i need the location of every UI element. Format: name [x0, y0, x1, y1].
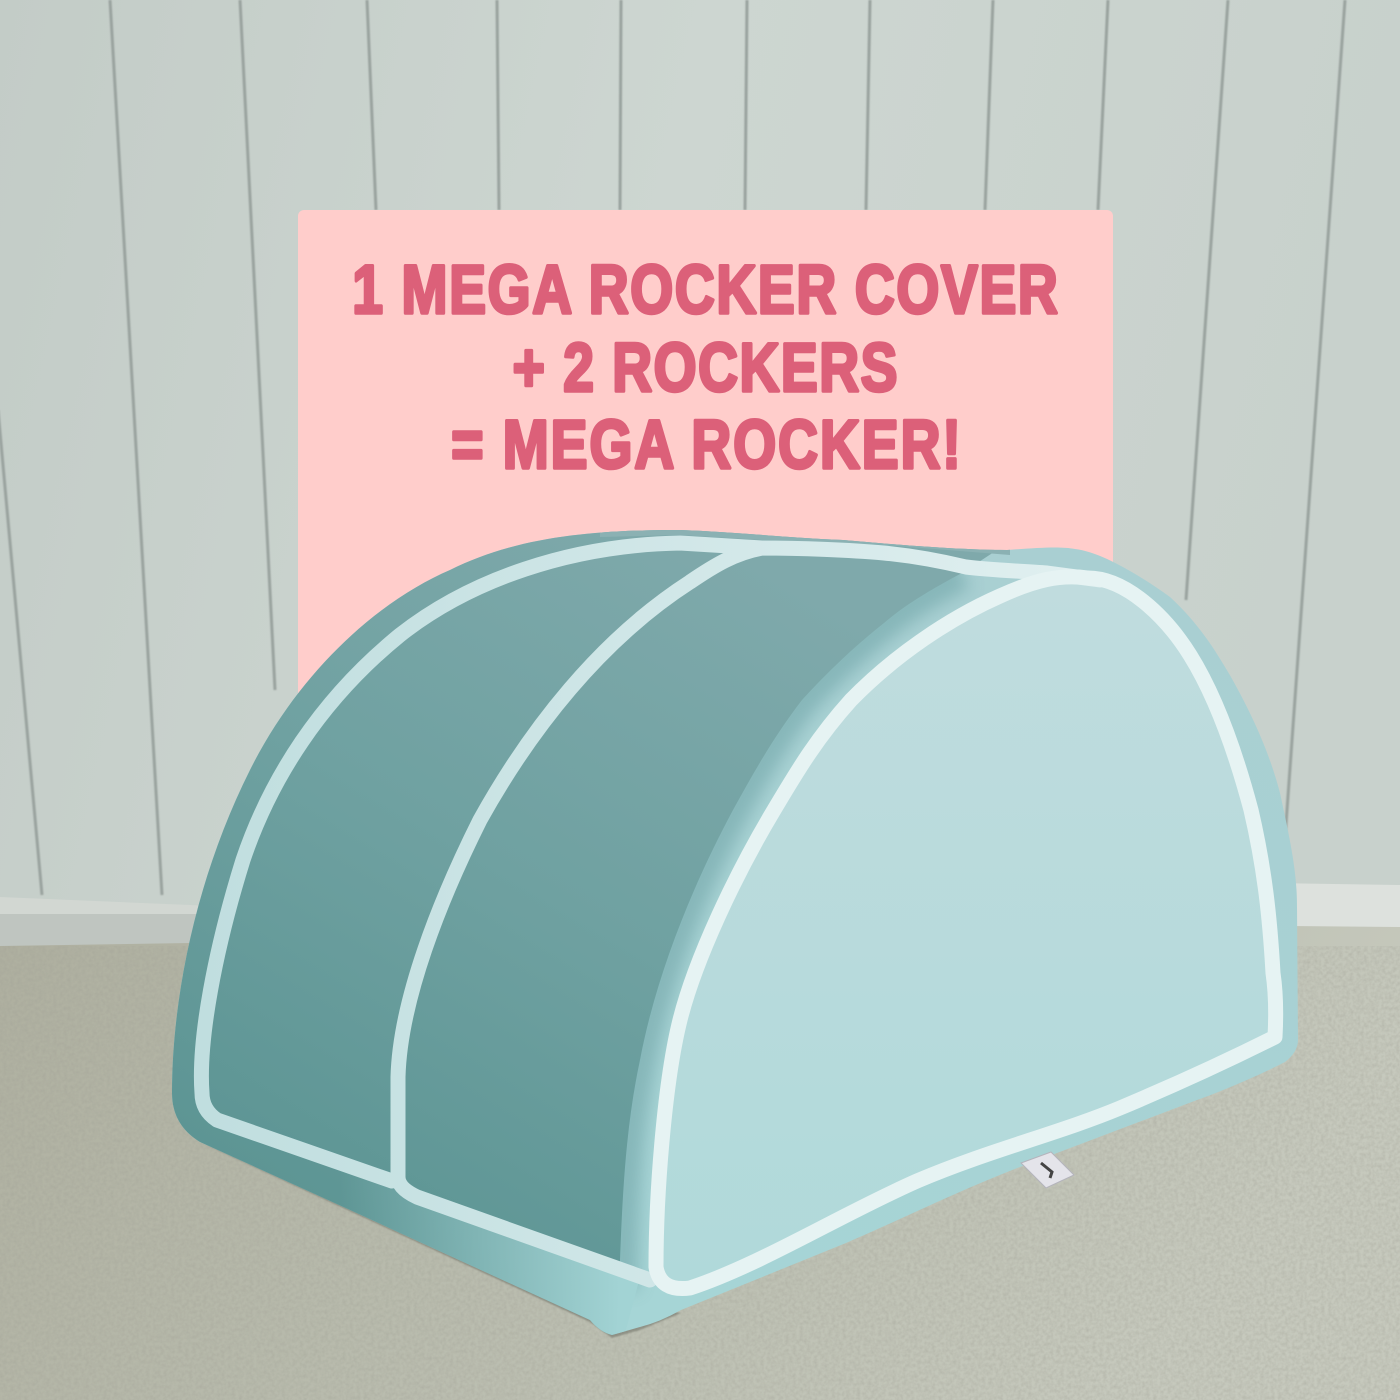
white outline: front face — [656, 577, 1276, 1289]
background: panelled wall — [0, 0, 1400, 950]
white outline: left section — [201, 543, 762, 1181]
soft floor shadow — [200, 1142, 681, 1338]
cushion body — [172, 530, 1298, 1335]
top strip above band — [600, 530, 1010, 555]
carpet texture — [0, 946, 1400, 1400]
icon: fabric label tag — [1021, 1152, 1074, 1188]
panel: pink caption background — [298, 210, 1113, 710]
seam shading — [621, 573, 962, 1290]
baseboard — [0, 883, 1400, 948]
title: caption text: 1 MEGA ROCKER COVER — [352, 251, 1058, 328]
white outline: middle section — [398, 548, 1100, 1280]
lower edge light strip — [374, 1184, 638, 1335]
front face — [656, 577, 1276, 1289]
title: caption text: = MEGA ROCKER! — [451, 406, 961, 483]
title: caption text — [352, 251, 1058, 483]
carpet floor — [0, 926, 1400, 1400]
mega rocker cushion — [172, 530, 1298, 1338]
side panel fill — [172, 530, 994, 1335]
dark side panels — [172, 530, 1010, 1335]
title: caption text: + 2 ROCKERS — [513, 329, 897, 406]
